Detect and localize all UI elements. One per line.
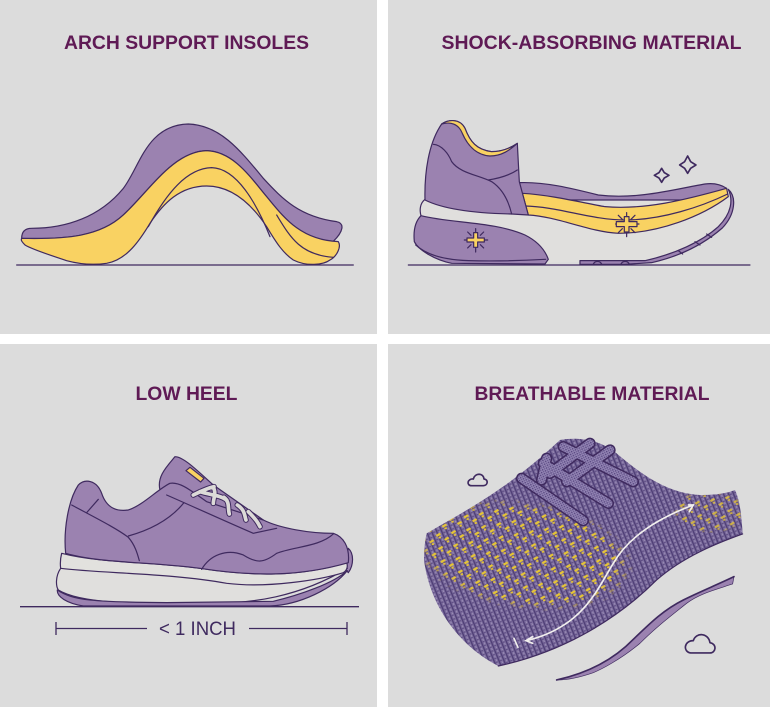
icon: heel impact star (464, 229, 488, 252)
illustration: arch insole (17, 124, 353, 265)
icon: sparkle (680, 156, 696, 173)
panel: arch support insoles (0, 0, 377, 334)
icon: cloud (468, 474, 487, 486)
icon: cloud (685, 635, 715, 653)
heading: arch support insoles: ARCH SUPPORT INSOLES (64, 33, 309, 54)
heading: low heel: LOW HEEL (136, 384, 238, 405)
heading: breathable material: BREATHABLE MATERIAL (474, 384, 710, 405)
panel: low heel (0, 344, 377, 707)
ground line (20, 606, 359, 608)
icon: sparkle (654, 168, 669, 182)
illustration: sneaker (56, 457, 353, 606)
panel: breathable material (388, 344, 770, 707)
dimension line: under one inch: < 1 INCH (159, 619, 236, 640)
illustration: cutaway shoe (408, 121, 750, 265)
dimension line: under one inch (56, 619, 347, 640)
arrow: airflow (514, 505, 693, 647)
panel: shock-absorbing material (388, 0, 770, 334)
icon: midfoot impact star (616, 213, 639, 237)
sole fragment (557, 577, 734, 680)
illustration: knit upper (424, 438, 744, 681)
laces (193, 487, 260, 527)
heading: shock-absorbing material: SHOCK-ABSORBING MATERIAL (442, 33, 742, 54)
laces (522, 443, 633, 521)
